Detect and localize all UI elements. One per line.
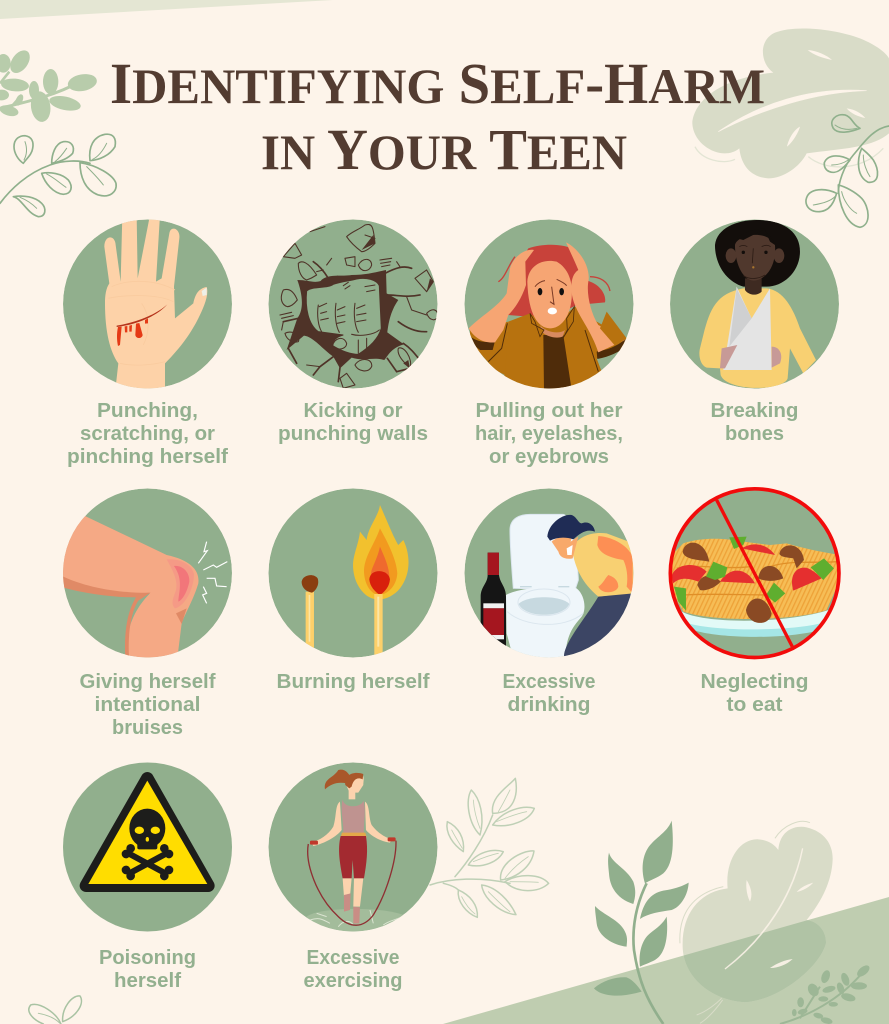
- label: Poisoning: [99, 947, 196, 969]
- panel: neglecting to eat: [670, 488, 840, 716]
- label: [304, 947, 402, 992]
- label: pinching herself: [67, 446, 228, 468]
- icon: bruised knee: [60, 488, 232, 660]
- label: [710, 400, 798, 445]
- decorative outline sprout, bottom left: [29, 996, 81, 1024]
- label: intentional: [94, 694, 200, 716]
- label: Excessive: [306, 947, 400, 969]
- label: scratching, or: [80, 423, 215, 445]
- label: [80, 671, 216, 739]
- decorative dark-green leaf branch, bottom centre: [594, 821, 689, 1024]
- label: [502, 671, 596, 716]
- panel: pulling out hair: [464, 220, 634, 468]
- label: hair, eyelashes,: [475, 423, 623, 445]
- panel: excessive exercising: [268, 762, 438, 992]
- icon: pasta plate with prohibition sign: [670, 488, 840, 658]
- title: IN YOUR TEEN: [261, 117, 627, 182]
- icon: cut palm: [63, 215, 232, 390]
- icon: woman with arm sling: [670, 220, 839, 388]
- label: [278, 400, 428, 445]
- label: Pulling out her: [476, 400, 623, 422]
- decorative large leaf, top right: [692, 28, 889, 178]
- decorative outline branch, right of exercise circle: [430, 778, 549, 917]
- bottom-right green band: [443, 897, 889, 1024]
- label: Punching,: [97, 400, 198, 422]
- icon: fist through wall: [268, 220, 438, 388]
- title: IDENTIFYING SELF-HARM: [110, 51, 765, 116]
- label: [67, 400, 228, 468]
- icon: woman vomiting with wine bottle: [464, 488, 634, 658]
- label: bruises: [112, 717, 183, 739]
- label: to eat: [726, 694, 783, 716]
- panel: intentional bruises: [60, 488, 232, 739]
- label: Breaking: [710, 400, 798, 422]
- icon: skull and crossbones warning sign: [63, 762, 232, 932]
- label: [99, 947, 196, 992]
- label: Neglecting: [700, 671, 808, 693]
- panel: kicking or punching walls: [268, 220, 438, 445]
- decorative outline branch, top right: [806, 115, 889, 227]
- icon: matches: [268, 488, 438, 661]
- label: Burning herself: [276, 671, 430, 693]
- panel: poisoning herself: [63, 762, 232, 992]
- label: bones: [725, 423, 784, 445]
- panel: excessive drinking: [464, 488, 634, 716]
- decorative filled sprig, top left: [0, 47, 98, 123]
- label: Excessive: [502, 671, 596, 693]
- label: drinking: [508, 694, 590, 716]
- panel: breaking bones: [670, 220, 839, 445]
- label: Kicking or: [304, 400, 403, 422]
- decorative outline branch, top left: [0, 134, 116, 217]
- panel: burning herself: [268, 488, 438, 693]
- title: [110, 51, 765, 182]
- icon: distressed woman: [464, 220, 634, 390]
- decorative large leaf, bottom right: [680, 821, 833, 1023]
- label: exercising: [304, 970, 402, 992]
- label: Giving herself: [80, 671, 216, 693]
- label: [475, 400, 623, 468]
- decorative small sprig in band, bottom right: [780, 963, 871, 1024]
- top-left decorative band: [0, 0, 333, 19]
- icon: woman skipping rope: [268, 762, 438, 937]
- label: punching walls: [278, 423, 428, 445]
- label: [700, 671, 808, 716]
- panel: punching, scratching, pinching: [63, 215, 232, 468]
- label: or eyebrows: [489, 446, 609, 468]
- label: herself: [114, 970, 181, 992]
